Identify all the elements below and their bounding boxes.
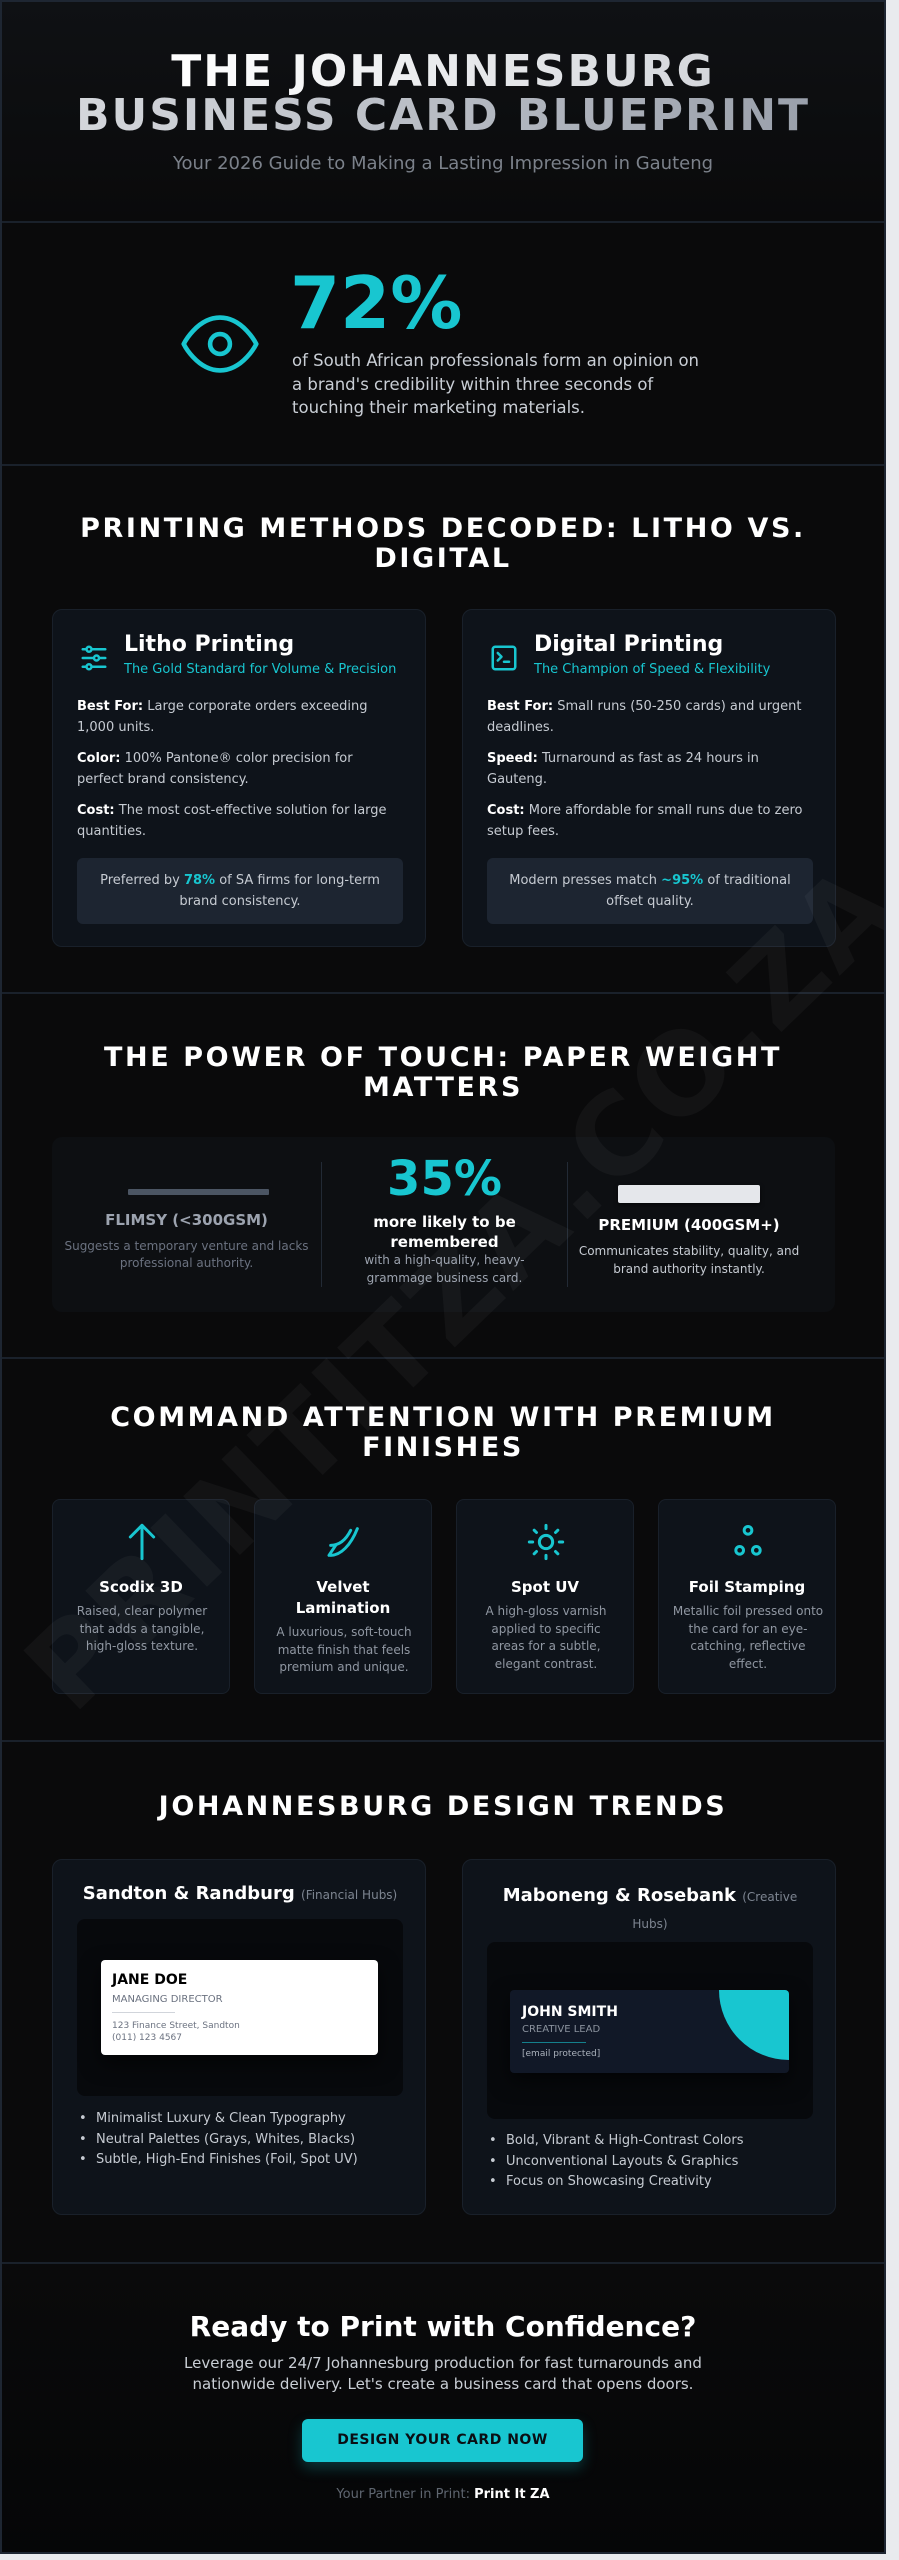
card body: Cost: More affordable for small runs due to zero setup fees. xyxy=(487,803,802,838)
stat column: remembered xyxy=(390,1233,499,1251)
callout: Preferred by 78% of SA firms for long-term brand consistency. xyxy=(100,873,380,909)
title: BUSINESS CARD BLUEPRINT xyxy=(76,90,810,141)
preview: creative card: JOHN SMITH xyxy=(522,2004,618,2020)
finish: velvet: Lamination xyxy=(296,1599,390,1617)
preview: minimalist card: (011) 123 4567 xyxy=(112,2033,182,2043)
finish: velvet xyxy=(254,1499,432,1694)
preview: minimalist card: JANE DOE xyxy=(112,1972,187,1988)
card body: Cost: The most cost-effective solution for large quantities. xyxy=(77,803,387,838)
heading: THE POWER OF TOUCH: PAPER WEIGHT xyxy=(104,1042,782,1073)
stat text: of South African professionals form an opinion on a brand's credibility within three seconds of touching their marketing materials. xyxy=(292,351,699,417)
card body: Speed: Turnaround as fast as 24 hours in Gauteng. xyxy=(487,751,759,786)
finish: spot uv xyxy=(456,1499,634,1694)
heading xyxy=(110,1402,776,1463)
flimsy column: Suggests a temporary venture and lacks professional authority. xyxy=(64,1239,309,1270)
finish: velvet: A luxurious, soft-touch matte finish that feels premium and unique. xyxy=(276,1625,412,1674)
heading: FINISHES xyxy=(362,1432,524,1463)
title xyxy=(76,46,810,141)
bullet list: Unconventional Layouts & Graphics xyxy=(506,2154,738,2168)
premium column: Communicates stability, quality, and brand authority instantly. xyxy=(579,1244,799,1276)
card body: Color: 100% Pantone® color precision for perfect brand consistency. xyxy=(77,751,353,786)
section: printing methods xyxy=(2,466,884,994)
button: DESIGN YOUR CARD NOW xyxy=(337,2432,548,2448)
heading xyxy=(104,1042,782,1103)
card body: Best For: Small runs (50-250 cards) and urgent deadlines. xyxy=(487,699,801,734)
card: sandton xyxy=(52,1859,426,2215)
cta text: Leverage our 24/7 Johannesburg production for fast turnarounds and xyxy=(184,2354,702,2372)
icon: eye xyxy=(181,315,259,373)
stat column: with a high-quality, heavy-grammage business card. xyxy=(364,1253,525,1285)
cta text xyxy=(184,2354,702,2393)
callout xyxy=(487,858,813,924)
footer credit: Your Partner in Print: Print It ZA xyxy=(336,2487,550,2502)
finish: scodix: Raised, clear polymer that adds a tangible, high-gloss texture. xyxy=(77,1604,207,1653)
bullet list: Neutral Palettes (Grays, Whites, Blacks) xyxy=(96,2132,355,2146)
premium column xyxy=(579,1185,799,1276)
finish: velvet: Velvet xyxy=(316,1578,370,1596)
card title: Litho Printing xyxy=(124,632,294,657)
card body xyxy=(77,699,387,838)
preview: creative card xyxy=(487,1942,813,2119)
bullet list: Minimalist Luxury & Clean Typography xyxy=(96,2111,346,2126)
subtitle: Your 2026 Guide to Making a Lasting Impression in Gauteng xyxy=(173,153,713,174)
card title: Maboneng & Rosebank (Creative Hubs) xyxy=(503,1885,797,1931)
preview: minimalist card: MANAGING DIRECTOR xyxy=(112,1994,223,2005)
finish: scodix: Scodix 3D xyxy=(99,1578,183,1596)
header xyxy=(2,2,884,223)
icon: terminal xyxy=(492,646,516,670)
section: paper weight xyxy=(2,994,884,1359)
bullet list: Bold, Vibrant & High-Contrast Colors xyxy=(506,2133,744,2148)
stat column: 35% xyxy=(387,1151,502,1207)
card body xyxy=(487,699,802,838)
preview: creative card: [email protected] xyxy=(522,2049,600,2059)
callout xyxy=(77,858,403,924)
section: design trends xyxy=(2,1742,884,2264)
bullet list: Focus on Showcasing Creativity xyxy=(506,2174,712,2189)
card: litho xyxy=(52,609,426,947)
finish: foil: Metallic foil pressed onto the card for an eye-catching, reflective effect. xyxy=(673,1604,823,1671)
card: digital xyxy=(462,609,836,947)
stat column: more likely to be xyxy=(373,1213,516,1231)
preview: minimalist card: 123 Finance Street, Sandton xyxy=(112,2021,240,2031)
cta text: nationwide delivery. Let's create a business card that opens doors. xyxy=(193,2375,693,2393)
flimsy column: FLIMSY (<300GSM) xyxy=(105,1211,268,1229)
icon: sliders xyxy=(82,646,106,670)
heading: PRINTING METHODS DECODED: LITHO VS. xyxy=(80,513,806,544)
card subtitle: The Champion of Speed & Flexibility xyxy=(534,662,770,677)
bullet list: Subtle, High-End Finishes (Foil, Spot UV) xyxy=(96,2152,358,2167)
stat number: 72% xyxy=(290,261,462,345)
card body: Best For: Large corporate orders exceeding 1,000 units. xyxy=(77,699,367,734)
heading xyxy=(80,513,806,574)
preview: minimalist card xyxy=(77,1919,403,2096)
finish: foil xyxy=(658,1499,836,1694)
stat section xyxy=(2,223,884,466)
card subtitle: The Gold Standard for Volume & Precision xyxy=(124,662,396,677)
title: THE JOHANNESBURG xyxy=(171,46,715,97)
bullet list xyxy=(81,2111,358,2167)
finish: spot uv: A high-gloss varnish applied to specific areas for a subtle, elegant contrast. xyxy=(485,1604,607,1671)
premium column: PREMIUM (400GSM+) xyxy=(598,1216,780,1234)
heading: COMMAND ATTENTION WITH PREMIUM xyxy=(110,1402,776,1433)
button xyxy=(302,2419,583,2462)
flimsy column xyxy=(64,1189,309,1270)
card: maboneng xyxy=(462,1859,836,2215)
preview: creative card: CREATIVE LEAD xyxy=(522,2024,600,2035)
cta heading: Ready to Print with Confidence? xyxy=(190,2310,696,2343)
heading: DIGITAL xyxy=(374,543,512,574)
card title: Sandton & Randburg (Financial Hubs) xyxy=(83,1883,397,1904)
heading: JOHANNESBURG DESIGN TRENDS xyxy=(159,1791,727,1822)
heading: MATTERS xyxy=(363,1072,523,1103)
stat column xyxy=(364,1151,525,1285)
finish: foil: Foil Stamping xyxy=(689,1578,805,1596)
section: finishes xyxy=(2,1359,884,1742)
bullet list xyxy=(491,2133,744,2189)
callout: Modern presses match ~95% of traditional offset quality. xyxy=(509,873,791,909)
card title: Digital Printing xyxy=(534,632,723,657)
finish: scodix xyxy=(52,1499,230,1694)
comparison panel xyxy=(52,1137,835,1312)
finish: spot uv: Spot UV xyxy=(511,1578,579,1596)
section: call to action xyxy=(2,2264,884,2556)
